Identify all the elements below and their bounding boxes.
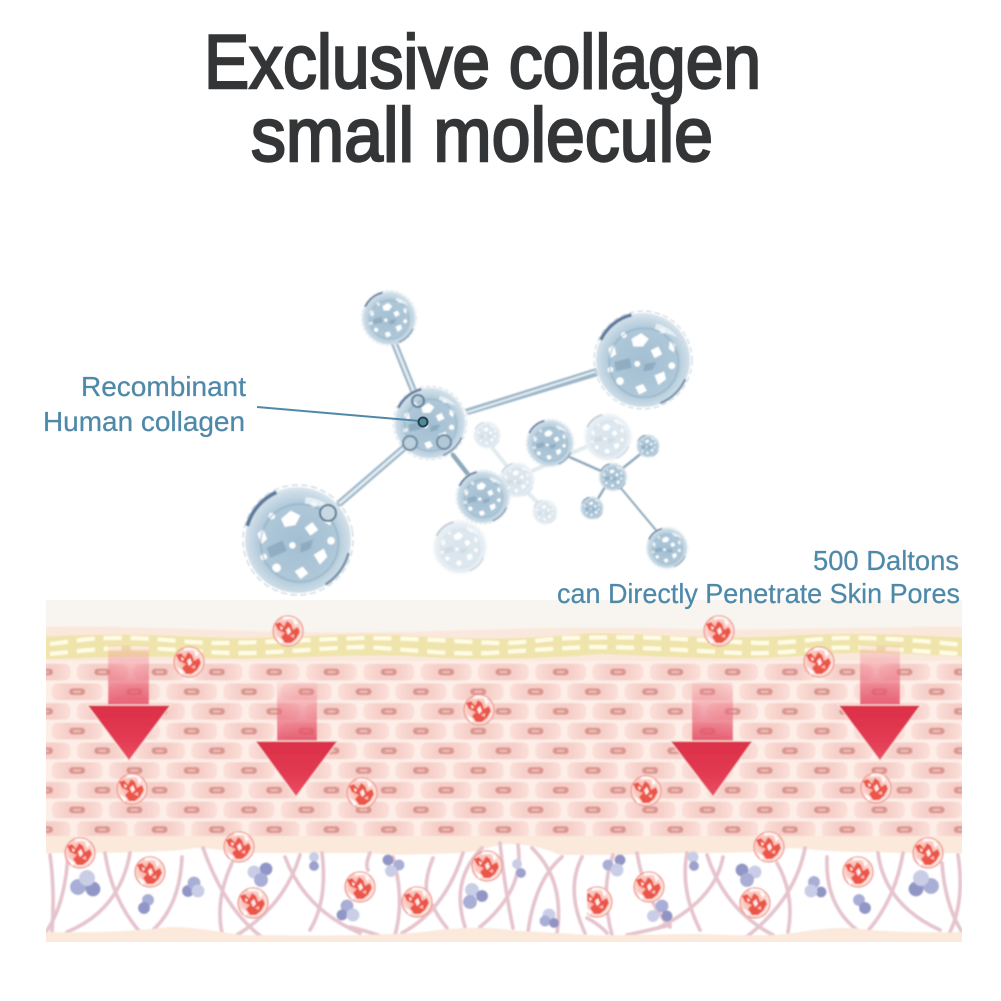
small molecule xyxy=(526,419,688,569)
callout: recombinant human collagen xyxy=(43,371,428,437)
yellow stratum band xyxy=(40,633,970,659)
collagen fibers xyxy=(46,843,962,938)
title line 1: Exclusive collagen xyxy=(204,20,761,105)
purple molecule clusters xyxy=(70,852,939,928)
main molecule spheres xyxy=(234,290,692,604)
callout: 500 daltons xyxy=(557,545,960,609)
red collagen bubbles xyxy=(65,616,943,918)
bottom peach band xyxy=(46,927,962,942)
arrow 2 xyxy=(255,682,338,797)
leader line xyxy=(257,407,420,421)
callout: 500 daltons: can Directly Penetrate Skin Pores xyxy=(557,578,960,609)
skin surface band xyxy=(46,600,962,632)
cell layer xyxy=(40,661,970,837)
arrow 4 xyxy=(838,645,921,761)
main molecule bonds xyxy=(340,340,598,503)
molecule illustration xyxy=(234,290,692,604)
label text xyxy=(43,371,246,437)
label text: Recombinant xyxy=(81,371,246,402)
label text: Human collagen xyxy=(43,406,245,437)
skin cross-section panel xyxy=(40,596,970,946)
arrow 3 xyxy=(670,682,753,797)
leader dot xyxy=(418,418,428,426)
peach under-surface layer xyxy=(46,626,962,661)
dermis white area xyxy=(40,844,970,936)
arrow 1 xyxy=(87,645,171,761)
title line 2: small molecule xyxy=(251,93,713,178)
callout: 500 daltons: 500 Daltons xyxy=(813,545,959,576)
title xyxy=(204,20,761,178)
faint background molecule xyxy=(433,413,632,574)
yellow band dashes xyxy=(50,637,962,654)
lower peach band xyxy=(46,836,962,838)
red arrows xyxy=(87,645,921,797)
